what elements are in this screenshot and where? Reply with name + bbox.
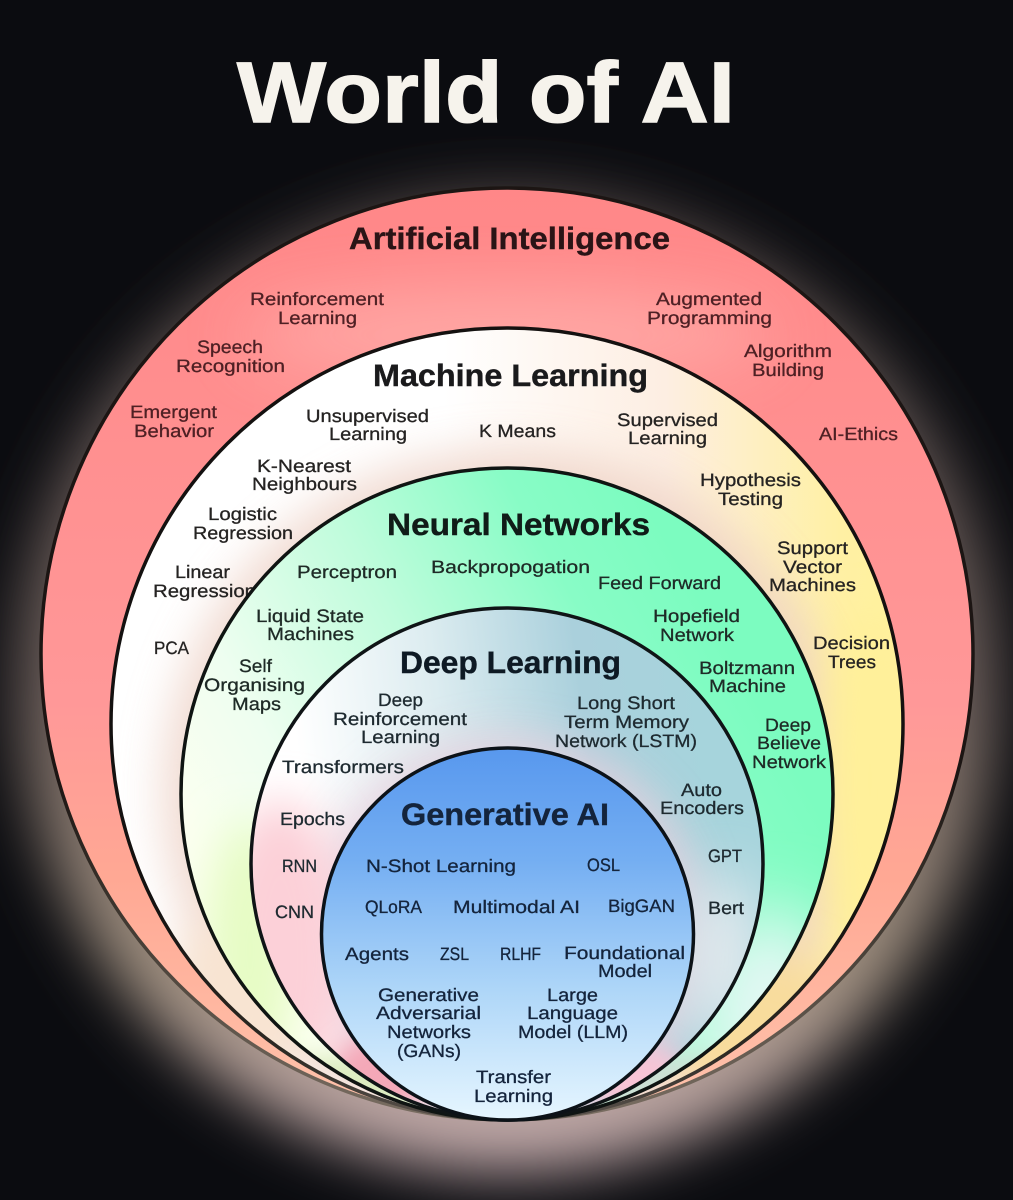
item: CNN: CNN	[275, 902, 314, 922]
item: Self Organising Maps: Organising	[204, 675, 305, 695]
item: Augmented Programming: Augmented	[656, 289, 762, 309]
panel: Artificial Intelligence	[41, 188, 973, 1120]
item: Emergent Behavior: Behavior	[134, 421, 214, 441]
item: Self Organising Maps: Maps	[232, 694, 281, 714]
item: Large Language Model (LLM): Large	[547, 985, 598, 1005]
heading: Artificial Intelligence: Artificial Intelligence	[349, 221, 670, 256]
item: Foundational Model: Foundational	[564, 943, 685, 963]
item: RLHF: RLHF	[500, 944, 541, 964]
item: PCA: PCA	[154, 638, 189, 658]
item: Algorithm Building	[744, 341, 832, 380]
item: Long Short Term Memory Network: Network (LSTM)	[555, 731, 697, 751]
item: K-Nearest Neighbours: K-Nearest	[257, 456, 351, 476]
item: Linear Regression: Linear	[175, 562, 230, 582]
item: Reinforcement Learning: Reinforcement	[250, 289, 384, 309]
item: Support Vector Machines: Machines	[769, 575, 856, 595]
item: Bert: Bert	[708, 898, 744, 918]
item: Deep Reinforcement Learning	[333, 690, 467, 747]
item: Long Short Term Memory Network	[555, 693, 697, 751]
item: Generative Adversarial Networks (GANs): (GANs)	[397, 1041, 461, 1061]
item: Decision Trees: Decision	[813, 633, 890, 653]
item: Hopefield Network: Hopefield	[653, 606, 740, 626]
item: Large Language Model (LLM): Language	[527, 1003, 618, 1023]
item: Decision Trees: Trees	[828, 652, 876, 672]
item: Long Short Term Memory Network: Long Short	[577, 693, 675, 713]
item: Deep Reinforcement Learning: Learning	[361, 727, 440, 747]
outer glow	[17, 192, 997, 1172]
item: Supervised Learning: Supervised	[617, 410, 718, 430]
item: Hypothesis Testing: Testing	[718, 489, 783, 509]
item: Deep Reinforcement Learning: Deep	[378, 690, 423, 710]
item: Transfer Learning: Transfer	[476, 1067, 551, 1087]
item: Supervised Learning	[617, 410, 718, 448]
title: World of AI	[237, 45, 735, 141]
item: Unsupervised Learning: Learning	[329, 424, 407, 444]
heading: Neural Networks: Neural Networks	[387, 507, 650, 542]
item: K-Nearest Neighbours	[252, 456, 357, 494]
item: Algorithm Building: Building	[752, 360, 824, 380]
item: Unsupervised Learning: Unsupervised	[306, 406, 429, 426]
panel: Machine Learning	[111, 328, 920, 1139]
item: Logistic Regression: Logistic	[208, 504, 277, 524]
item: Self Organising Maps: Self	[239, 656, 273, 676]
item: Hypothesis Testing: Hypothesis	[700, 470, 801, 490]
item: Deep Believe Network	[752, 715, 827, 772]
item: K-Nearest Neighbours: Neighbours	[252, 474, 357, 494]
item: Deep Believe Network: Network	[752, 752, 827, 772]
item: RNN: RNN	[282, 856, 317, 876]
item: Self Organising Maps	[204, 656, 305, 714]
item: Speech Recognition: Recognition	[176, 356, 285, 376]
heading: Generative AI: Generative AI	[401, 797, 609, 832]
item: Boltzmann Machine	[699, 658, 795, 696]
item: Unsupervised Learning	[306, 406, 429, 444]
item: Emergent Behavior	[130, 402, 217, 441]
item: Feed Forward: Feed Forward	[598, 573, 721, 593]
panel: Deep Learning	[210, 608, 763, 1132]
item: Boltzmann Machine: Machine	[709, 676, 786, 696]
item: Deep Believe Network: Deep	[765, 715, 811, 735]
heading: Machine Learning: Machine Learning	[373, 358, 648, 393]
item: N-Shot Learning: N-Shot Learning	[366, 856, 516, 876]
item: QLoRA: QLoRA	[365, 897, 422, 917]
item: Generative Adversarial Networks (GANs): Networks	[387, 1022, 471, 1042]
item: Hopefield Network: Network	[660, 625, 735, 645]
item: Foundational Model	[564, 943, 685, 981]
item: AI-Ethics: AI-Ethics	[819, 424, 898, 444]
item: Backpropogation: Backpropogation	[431, 557, 590, 577]
item: Agents: Agents	[345, 944, 409, 964]
item: Supervised Learning: Learning	[628, 428, 707, 448]
item: Augmented Programming	[647, 289, 772, 328]
item: Logistic Regression: Regression	[193, 523, 293, 543]
panel: Neural Networks	[181, 468, 840, 1120]
item: Deep Reinforcement Learning: Reinforcement	[333, 709, 467, 729]
item: BigGAN: BigGAN	[608, 896, 675, 916]
item: Reinforcement Learning	[250, 289, 384, 328]
item: GPT: GPT	[708, 846, 742, 866]
item: Boltzmann Machine: Boltzmann	[699, 658, 795, 678]
item: Auto Encoders	[660, 780, 744, 818]
item: OSL: OSL	[587, 855, 620, 875]
item: ZSL: ZSL	[440, 944, 469, 964]
item: Support Vector Machines: Support	[777, 538, 848, 558]
item: Liquid State Machines	[256, 606, 364, 644]
item: Long Short Term Memory Network: Term Memory	[564, 712, 689, 732]
item: Auto Encoders: Encoders	[660, 798, 744, 818]
item: Liquid State Machines: Machines	[267, 624, 354, 644]
heading: Deep Learning: Deep Learning	[400, 645, 621, 680]
item: Transfer Learning: Learning	[474, 1086, 553, 1106]
item: Support Vector Machines: Vector	[783, 557, 842, 577]
item: Augmented Programming: Programming	[647, 308, 772, 328]
item: Foundational Model: Model	[598, 961, 652, 981]
item: Linear Regression: Regression	[153, 581, 256, 601]
item: Speech Recognition: Speech	[197, 337, 263, 357]
item: Decision Trees	[813, 633, 890, 672]
item: Transformers: Transformers	[282, 757, 404, 777]
item: Emergent Behavior: Emergent	[130, 402, 217, 422]
item: Auto Encoders: Auto	[681, 780, 722, 800]
item: Deep Believe Network: Believe	[757, 733, 821, 753]
item: Large Language Model (LLM)	[518, 985, 628, 1042]
item: Perceptron: Perceptron	[297, 562, 397, 582]
item: Epochs: Epochs	[280, 809, 345, 829]
item: Support Vector Machines	[769, 538, 856, 595]
item: Hypothesis Testing	[700, 470, 801, 509]
item: Generative Adversarial Networks (GANs): Adversarial	[376, 1003, 481, 1023]
item: Speech Recognition	[176, 337, 285, 376]
item: Liquid State Machines: Liquid State	[256, 606, 364, 626]
item: Generative Adversarial Networks (GANs): Generative	[378, 985, 479, 1005]
item: K Means: K Means	[479, 421, 556, 441]
item: Generative Adversarial Networks (GANs)	[376, 985, 481, 1061]
item: Algorithm Building: Algorithm	[744, 341, 832, 361]
item: Hopefield Network	[653, 606, 740, 645]
item: Transfer Learning	[474, 1067, 553, 1106]
item: Multimodal AI: Multimodal AI	[453, 897, 580, 917]
panel: Generative AI	[322, 748, 694, 1120]
item: Logistic Regression	[193, 504, 293, 543]
item: Linear Regression	[153, 562, 256, 601]
item: Large Language Model (LLM): Model (LLM)	[518, 1022, 628, 1042]
item: Reinforcement Learning: Learning	[278, 308, 357, 328]
